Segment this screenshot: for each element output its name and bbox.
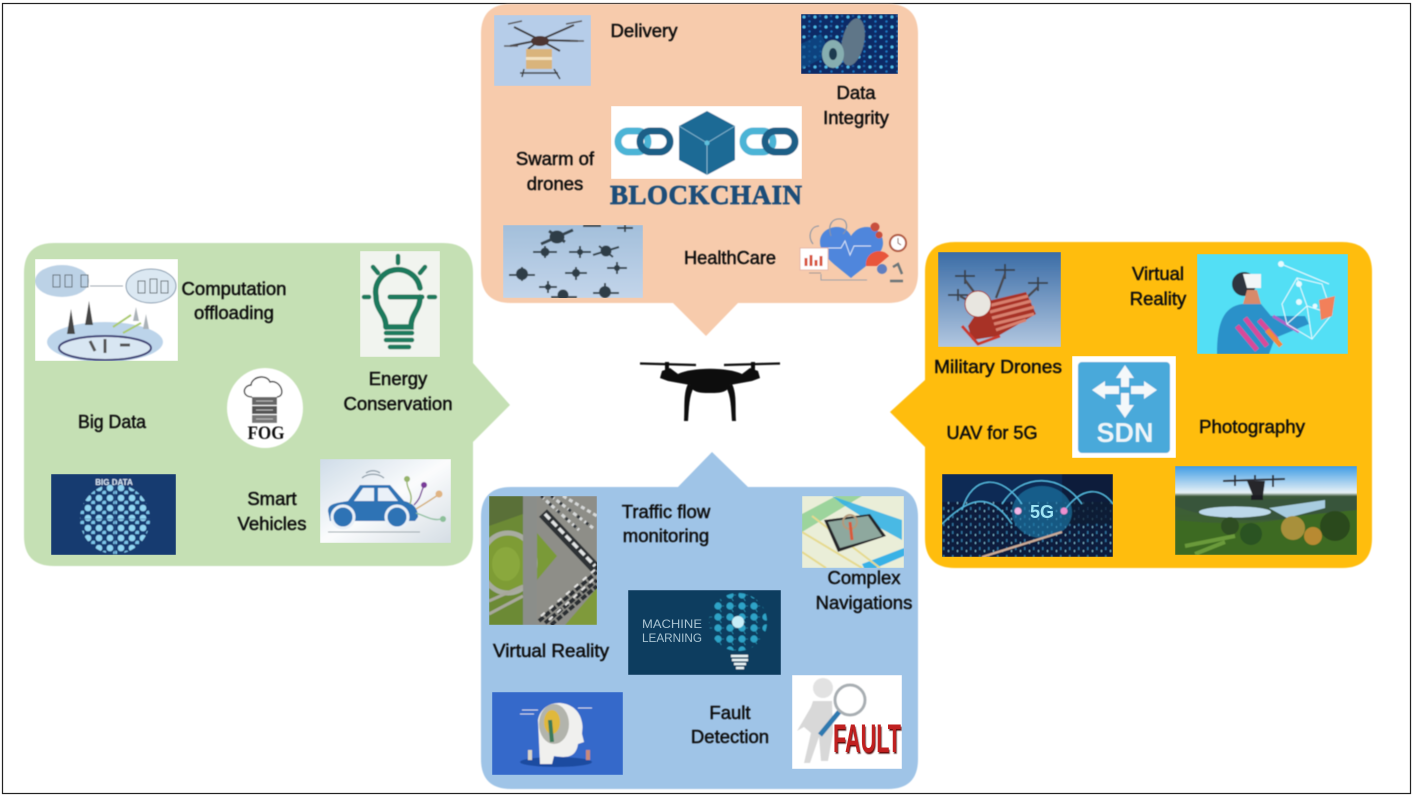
image: traffic flow — [489, 496, 597, 625]
label: virtual reality: Reality — [1130, 288, 1187, 309]
image: machine learning: LEARNING — [642, 631, 702, 645]
label: swarm of drones: Swarm of — [516, 148, 595, 169]
icon label: sdn: SDN — [1096, 417, 1154, 448]
image: energy bulb — [360, 251, 440, 357]
icon: fog circle — [226, 368, 304, 448]
image: virtual reality user — [1197, 254, 1348, 354]
image: 5G city: 5G — [1030, 502, 1054, 522]
logo text: blockchain: BLOCKCHAIN — [610, 180, 802, 210]
label: data integrity: Integrity — [823, 107, 890, 128]
callout shape: green — [24, 243, 510, 566]
image: military drone — [938, 252, 1061, 347]
label: complex navigations: Navigations — [816, 592, 912, 613]
label: virtual reality: Virtual Reality — [493, 640, 610, 661]
image: computation offloading diagram — [35, 259, 178, 361]
image: machine learning — [628, 590, 781, 675]
label: energy conservation: Conservation — [343, 393, 453, 414]
image: big data — [51, 474, 176, 555]
label: smart vehicles: Smart — [247, 488, 297, 509]
callout shape: peach — [481, 4, 918, 336]
label: computation offloading: offloading — [194, 302, 274, 323]
label: smart vehicles: Vehicles — [238, 513, 306, 534]
label: energy conservation: Energy — [369, 368, 428, 389]
label: photography: Photography — [1199, 416, 1306, 437]
image: AI head — [492, 692, 623, 775]
label: big data: Big Data — [78, 411, 147, 432]
label: fault detection: Fault — [709, 702, 751, 723]
panel: machine learning (blue callout) — [481, 452, 918, 789]
label: complex navigations: Complex — [828, 567, 901, 588]
icon: healthcare heart — [800, 218, 908, 283]
icon label: fog: FOG — [248, 423, 285, 444]
panel: blockchain (peach callout) — [481, 4, 918, 336]
label: traffic flow monitoring: monitoring — [623, 525, 709, 546]
label: computation offloading: Computation — [182, 278, 286, 299]
image: big data: BIG DATA — [95, 478, 133, 487]
callout shape: orange — [890, 242, 1372, 568]
logo: blockchain — [611, 106, 802, 179]
icon: central quadcopter drone — [640, 362, 780, 421]
icon: sdn — [1072, 356, 1176, 458]
image: navigation map — [802, 496, 904, 568]
label: uav for 5g: UAV for 5G — [946, 422, 1038, 443]
image: smart vehicle — [320, 459, 451, 543]
label: delivery: Delivery — [610, 20, 678, 41]
image: aerial photography — [1175, 466, 1357, 555]
panel: sdn (orange callout) — [890, 242, 1372, 568]
label: military drones: Military Drones — [934, 356, 1062, 377]
image: delivery drone — [494, 15, 591, 86]
image: 5G city — [942, 474, 1113, 557]
image: data integrity — [801, 14, 898, 74]
label: fault detection: Detection — [691, 726, 769, 747]
image: fault detection — [792, 675, 902, 769]
label: healthcare: HealthCare — [684, 247, 776, 268]
image: swarm of drones — [503, 225, 643, 298]
label: data integrity: Data — [836, 82, 876, 103]
callout shape: blue — [481, 452, 918, 789]
label: traffic flow monitoring: Traffic flow — [622, 501, 711, 522]
image: machine learning: MACHINE — [642, 617, 702, 631]
label: virtual reality: Virtual — [1132, 263, 1184, 284]
label: swarm of drones: drones — [527, 173, 583, 194]
panel: fog (green callout) — [24, 243, 510, 566]
